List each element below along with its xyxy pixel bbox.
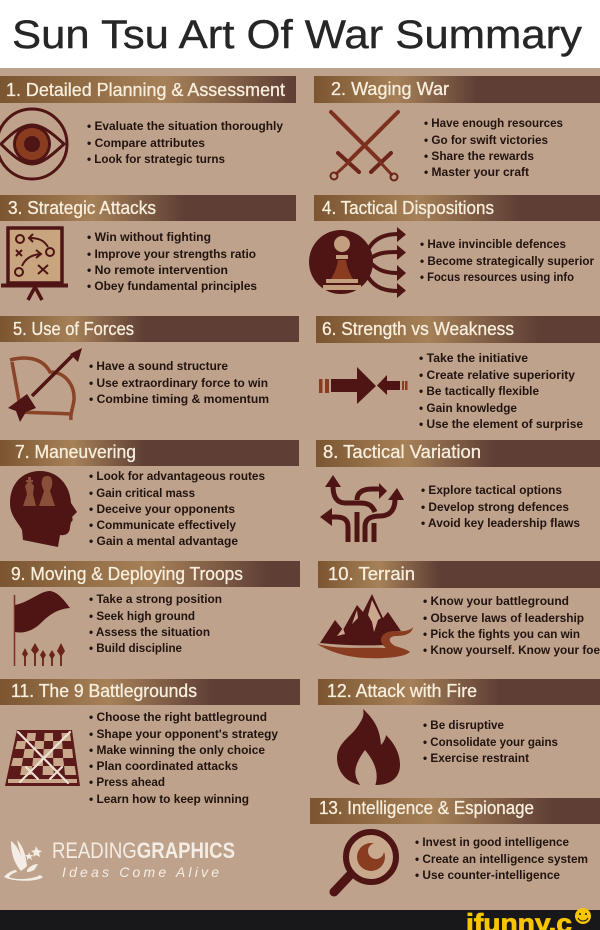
bullet list: section 3: • No remote intervention (87, 263, 228, 277)
heading: section 2: 2. Waging War (331, 79, 449, 99)
icon: branching arrows (320, 475, 404, 542)
panel: 7. Maneuvering (0, 440, 299, 548)
bullet list: section 1: • Compare attributes (87, 136, 205, 150)
heading: section 9: 9. Moving & Deploying Troops (11, 564, 243, 584)
bullet list: section 6: • Be tactically flexible (419, 384, 539, 398)
bullet list: section 10: • Observe laws of leadership (423, 611, 584, 625)
icon: mountains and river (317, 594, 413, 658)
bullet list: section 4: • Become strategically superior (420, 254, 594, 268)
bullet list: section 12: • Consolidate your gains (423, 735, 558, 749)
panel: 3. Strategic Attacks (0, 195, 296, 300)
bullet list: section 13: • Create an intelligence system (415, 852, 588, 866)
panel: 2. Waging War (314, 76, 600, 180)
bullet list: section 10: • Pick the fights you can win (423, 627, 580, 641)
icon: magnifying glass (334, 832, 396, 892)
heading: section 5 (0, 316, 299, 342)
bullet list: section 9: • Seek high ground (89, 609, 195, 623)
heading: section 2 (314, 76, 600, 103)
heading: section 8: 8. Tactical Variation (323, 442, 481, 462)
bullet list: section 1: • Look for strategic turns (87, 152, 225, 166)
icon: pawn with arrows (309, 227, 406, 298)
panel: 4. Tactical Dispositions (309, 195, 600, 298)
logo: Readinggraphics (4, 838, 235, 881)
bullet list: section 4: • Have invincible defences (420, 237, 566, 251)
panel: 11. The 9 Battlegrounds (0, 679, 300, 806)
heading: section 12 (318, 679, 600, 705)
bullet list: section 6 (419, 351, 583, 431)
icon: head with chess pieces (10, 471, 77, 547)
bullet list: section 10 (423, 594, 600, 657)
bullet list: section 12: • Exercise restraint (423, 751, 529, 765)
icon: eye (0, 109, 67, 179)
heading: section 5: 5. Use of Forces (13, 319, 134, 339)
bullet list: section 5: • Have a sound structure (89, 359, 228, 373)
icon: crossed swords (330, 112, 398, 180)
bullet list: section 8: • Develop strong defences (421, 500, 569, 514)
bullet list: section 13: • Invest in good intelligence (415, 835, 569, 849)
bullet list: section 4 (420, 237, 594, 284)
heading: section 11 (0, 679, 300, 705)
bullet list: section 9 (89, 592, 222, 655)
bullet list: section 5: • Use extraordinary force to win (89, 376, 268, 390)
bullet list: section 9: • Take a strong position (89, 592, 222, 606)
heading: section 10: 10. Terrain (328, 564, 415, 584)
heading: section 4 (314, 195, 600, 221)
bullet list: section 2: • Go for swift victories (424, 133, 548, 147)
bullet list: section 7: • Deceive your opponents (89, 502, 235, 516)
icon: chessboard with swords (5, 730, 80, 786)
panel: 6. Strength vs Weakness (316, 316, 600, 431)
bullet list: section 5: • Combine timing & momentum (89, 392, 269, 406)
bullet list: section 13: • Use counter-intelligence (415, 868, 560, 882)
bullet list: section 3: • Improve your strengths ratio (87, 247, 256, 261)
bullet list: section 6: • Create relative superiority (419, 368, 575, 382)
wordmark: READINGGRAPHICS (52, 838, 235, 863)
bullet list: section 7: • Gain a mental advantage (89, 534, 238, 548)
bullet list: section 5 (89, 359, 269, 406)
bullet list: section 4: • Focus resources using info (420, 270, 574, 284)
bullet list: section 2: • Have enough resources (424, 116, 563, 130)
bullet list: section 8: • Avoid key leadership flaws (421, 516, 580, 530)
title: Sun Tsu Art Of War Summary (12, 13, 582, 57)
bullet list: section 11: • Plan coordinated attacks (89, 759, 238, 773)
panel: 13. Intelligence & Espionage (310, 798, 600, 892)
icon: flag and spears (14, 591, 70, 666)
heading: section 6 (316, 316, 600, 343)
bullet list: section 8: • Explore tactical options (421, 483, 562, 497)
heading: section 1: 1. Detailed Planning & Assessment (6, 80, 285, 100)
heading: section 12: 12. Attack with Fire (327, 681, 477, 701)
icon: flame (337, 709, 400, 786)
panel: 1. Detailed Planning & Assessment (0, 76, 296, 179)
bullet list: section 3: • Win without fighting (87, 230, 211, 244)
bullet list: section 10: • Know your battleground (423, 594, 569, 608)
bullet list: section 2: • Share the rewards (424, 149, 534, 163)
panel: 12. Attack with Fire (318, 679, 600, 786)
bullet list: section 12: • Be disruptive (423, 718, 504, 732)
bullet list: section 7 (89, 469, 265, 548)
heading: section 3: 3. Strategic Attacks (8, 198, 156, 218)
heading: section 13: 13. Intelligence & Espionage (319, 798, 534, 818)
panel: 5. Use of Forces (0, 316, 299, 422)
bullet list: section 7: • Gain critical mass (89, 486, 195, 500)
heading: section 6: 6. Strength vs Weakness (322, 319, 514, 339)
bullet list: section 11: • Shape your opponent's strategy (89, 727, 278, 741)
heading: section 7: 7. Maneuvering (15, 442, 136, 462)
heading: section 11: 11. The 9 Battlegrounds (11, 681, 197, 701)
bullet list: section 11: • Choose the right battleground (89, 710, 267, 724)
bullet list: section 8 (421, 483, 580, 530)
heading: section 9 (0, 561, 300, 587)
heading: section 4: 4. Tactical Dispositions (322, 198, 494, 218)
bullet list: section 9: • Assess the situation (89, 625, 210, 639)
bullet list: section 7: • Look for advantageous routes (89, 469, 265, 483)
bullet list: section 6: • Use the element of surprise (419, 417, 583, 431)
bullet list: section 6: • Gain knowledge (419, 401, 517, 415)
bullet list: section 3: • Obey fundamental principles (87, 279, 257, 293)
panel: 8. Tactical Variation (316, 440, 600, 542)
heading: section 3 (0, 195, 296, 221)
bullet list: section 1: • Evaluate the situation thoroughly (87, 119, 283, 133)
bullet list: section 2: • Master your craft (424, 165, 529, 179)
heading: section 10 (318, 561, 600, 588)
bullet list: section 9: • Build discipline (89, 641, 182, 655)
panel: 9. Moving & Deploying Troops (0, 561, 300, 666)
bullet list: section 12 (423, 718, 558, 765)
bullet list: section 13 (415, 835, 588, 882)
bullet list: section 11: • Learn how to keep winning (89, 792, 249, 806)
icon: strategy board (1, 228, 68, 300)
bullet list: section 1 (87, 119, 283, 166)
heading: section 8 (316, 440, 600, 467)
bullet list: section 6: • Take the initiative (419, 351, 528, 365)
bullet list: section 10: • Know yourself. Know your foe (423, 643, 600, 657)
tagline: Ideas Come Alive (62, 864, 219, 880)
icon: open book (4, 840, 43, 881)
icon: opposing arrows (319, 367, 408, 404)
heading: section 7 (0, 440, 299, 466)
bullet list: section 11: • Press ahead (89, 775, 165, 789)
bullet list: section 7: • Communicate effectively (89, 518, 236, 532)
bullet list: section 11 (89, 710, 278, 806)
footer bar (0, 908, 600, 930)
panel: 10. Terrain (317, 561, 600, 658)
bullet list: section 11: • Make winning the only choice (89, 743, 265, 757)
bullet list: section 2 (424, 116, 563, 179)
heading: section 13 (310, 798, 600, 824)
icon: bow and arrow (8, 348, 82, 422)
bullet list: section 3 (87, 230, 257, 293)
